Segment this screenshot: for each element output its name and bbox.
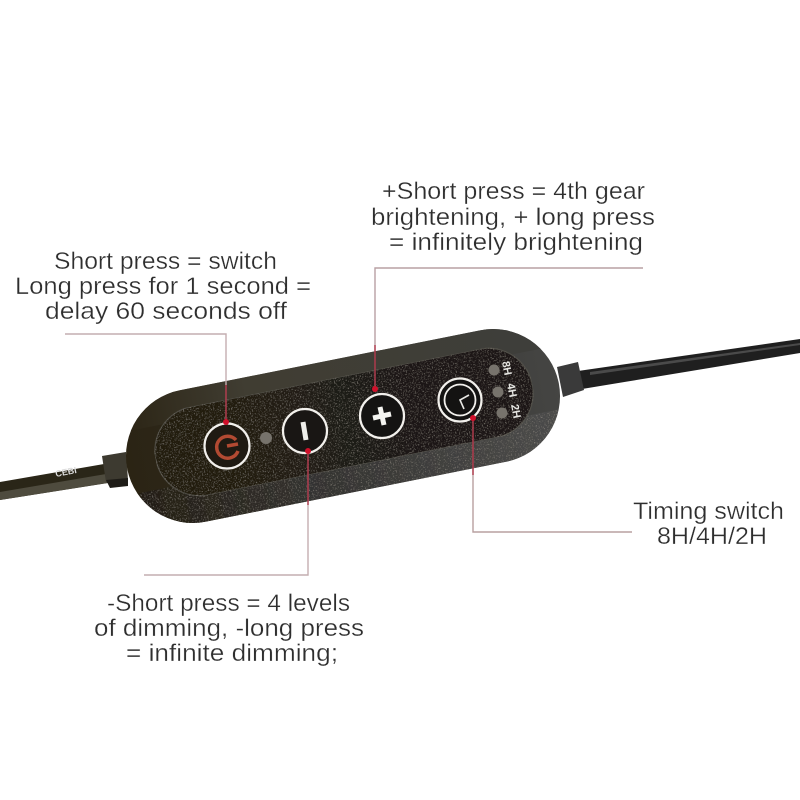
button: minus [283,409,327,453]
leader: timer button [470,415,632,532]
cable: right [557,339,800,397]
cable: left: CEBI [54,465,78,479]
cable: left [0,452,128,500]
timer LEDs and labels: 2H [508,403,523,419]
button: plus [360,394,404,438]
leader: power button [65,334,229,425]
text: minus button: = infinite dimming; [126,640,338,667]
timer LEDs and labels: 4H [504,382,519,398]
controller body [126,329,560,523]
text: timing switch [633,498,784,550]
button: timer [438,378,482,422]
text: timing switch: Timing switch [633,498,784,525]
text: power button: Short press = switch [54,248,277,275]
timer LEDs and labels [488,360,523,419]
text: minus button: of dimming, -long press [94,615,364,642]
text: timing switch: 8H/4H/2H [657,523,767,550]
text: minus button: -Short press = 4 levels [107,590,350,617]
text: minus button [94,590,364,667]
text: plus button: +Short press = 4th gear [382,178,645,205]
text: plus button: brightening, + long press [371,204,655,231]
infographic: controller diagram [0,182,800,666]
button panel [147,340,541,504]
text: power button [15,248,311,325]
timer LEDs and labels: 8H [499,360,514,376]
text: power button: Long press for 1 second = [15,273,311,300]
leader: plus button [372,268,643,392]
button: power [204,424,250,468]
text: plus button [371,178,655,256]
text: power button: delay 60 seconds off [45,298,287,325]
leader: minus button [144,448,311,575]
shell [126,329,560,523]
status LED [260,432,272,444]
text: plus button: = infinitely brightening [389,229,643,256]
